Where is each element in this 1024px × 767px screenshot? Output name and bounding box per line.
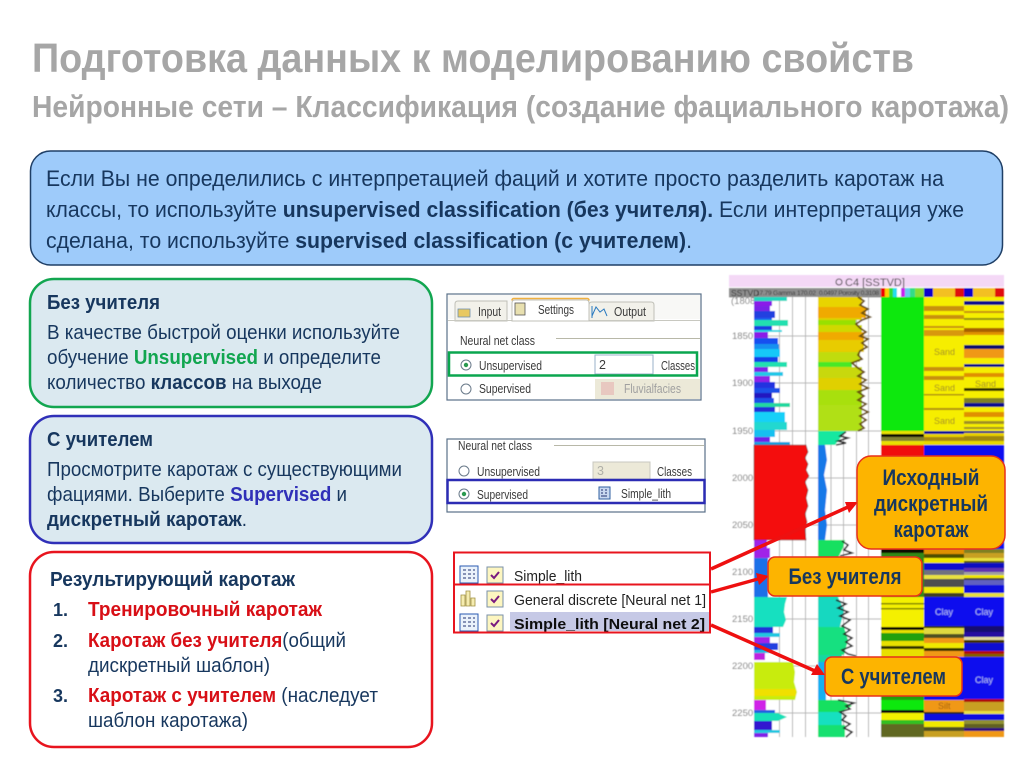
track 5: supervised facies: Sand <box>975 379 996 389</box>
screenshot: settings tab unsupervised: Classes <box>661 359 695 373</box>
callout: source discrete log <box>857 456 1005 549</box>
arrow: to supervised <box>711 625 825 675</box>
list: log types: Каротаж без учителя(общий <box>88 630 346 652</box>
screenshot: log list: Simple_lith <box>514 568 582 585</box>
screenshot: supervised selection: Simple_lith <box>621 487 671 501</box>
highlight: training log <box>454 552 710 584</box>
text: unsupervised body <box>47 322 400 394</box>
heading: unsupervised: Без учителя <box>47 292 160 314</box>
screenshot: supervised selection: Neural net class <box>458 439 532 453</box>
depth axis: 2050 <box>732 520 753 531</box>
list: log types: дискретный шаблон) <box>88 655 270 677</box>
panel: intro callout: сделана, то используйте supervised classification (с учителем). <box>46 228 692 253</box>
depth axis: 1950 <box>732 426 753 437</box>
screenshot: settings tab unsupervised: Neural net class <box>460 334 535 348</box>
log header: 17.79 Gamma 170.02 <box>756 290 816 297</box>
depth axis: 1850 <box>732 331 753 342</box>
text: supervised body: фациями. Выберите Supervised и <box>47 484 347 506</box>
highlight: supervised <box>448 480 704 503</box>
title: Подготовка данных к моделированию свойств <box>32 35 914 81</box>
panel: supervised <box>30 416 432 543</box>
callout: unsupervised <box>768 557 922 596</box>
screenshot: settings tab unsupervised: Output <box>614 305 646 319</box>
list: log types: 1. <box>53 600 68 620</box>
text: supervised body <box>47 459 402 531</box>
callout: source discrete log: каротаж <box>894 517 969 542</box>
log header <box>729 275 1004 298</box>
screenshot: settings tab unsupervised: 2 <box>599 358 606 372</box>
track 4: unsupervised facies: Sand <box>934 416 955 426</box>
screenshot: log list: Simple_lith [Neural net 2] <box>514 616 705 633</box>
callout: supervised: С учителем <box>841 664 946 689</box>
text: supervised body: Просмотрите каротаж с существующими <box>47 459 402 481</box>
screenshot: settings tab unsupervised: Supervised <box>479 382 531 396</box>
arrow: to unsupervised <box>711 573 769 592</box>
list: log types: 3. <box>53 686 68 706</box>
list: log types <box>53 599 378 732</box>
depth axis: 2200 <box>732 661 753 672</box>
screenshot: supervised selection: Supervised <box>477 488 528 502</box>
callout: unsupervised: Без учителя <box>788 564 902 589</box>
depth axis: 2100 <box>732 567 753 578</box>
track 4: unsupervised facies: Clay <box>935 607 954 617</box>
title <box>32 35 1009 124</box>
depth axis <box>731 296 758 719</box>
screenshot: settings tab unsupervised: Unsupervised <box>479 359 542 373</box>
depth axis: 1900 <box>732 378 753 389</box>
heading: resulting log: Результирующий каротаж <box>50 569 296 591</box>
chart: well log display <box>729 275 1004 737</box>
depth axis: 2000 <box>732 473 753 484</box>
track 2: porosity <box>818 297 870 737</box>
screenshot: log list: General discrete [Neural net 1] <box>514 592 706 609</box>
list: log types: 2. <box>53 631 68 651</box>
panel: resulting log <box>30 552 432 747</box>
callout: source discrete log: Исходный <box>882 465 980 490</box>
depth axis: 2250 <box>732 708 753 719</box>
track 1: gamma <box>754 297 881 737</box>
screenshot: supervised selection <box>447 439 705 512</box>
text: supervised body: дискретный каротаж. <box>47 509 247 531</box>
arrow: to source log <box>711 502 858 569</box>
screenshot: supervised selection: Unsupervised <box>477 465 540 479</box>
depth axis: (1808) <box>731 296 758 307</box>
panel: intro callout: Если Вы не определились с интерпретацией фаций и хотите просто разделить каротаж на <box>46 166 945 191</box>
track 4: unsupervised facies: Sand <box>934 347 955 357</box>
panel: intro callout: классы, то используйте unsupervised classification (без учителя). Если интерпретация уже <box>46 197 964 222</box>
log header: 0.0497 Porosity 0.3108 <box>819 290 879 297</box>
track 4: unsupervised facies: Silt <box>938 701 951 711</box>
callout: source discrete log: дискретный <box>874 491 988 516</box>
depth axis: 2150 <box>732 614 753 625</box>
track 4: unsupervised facies <box>924 297 964 737</box>
text: unsupervised body: обучение Unsupervised и определите <box>47 347 381 369</box>
screenshot: supervised selection: 3 <box>597 464 604 478</box>
highlight: unsupervised <box>449 352 697 376</box>
track 4: unsupervised facies: Sand <box>934 383 955 393</box>
panel: intro callout <box>30 151 1002 265</box>
screenshot: settings tab unsupervised: Fluvialfacies <box>624 382 681 396</box>
log header: SSTVD <box>731 288 759 298</box>
list: log types: Каротаж с учителем (наследует <box>88 685 378 707</box>
log header: C4 [SSTVD] <box>845 277 905 289</box>
screenshot: log list <box>454 552 710 633</box>
list: log types: шаблон каротажа) <box>88 710 248 732</box>
highlight: neural net logs <box>454 584 710 632</box>
track 3: training facies <box>881 297 924 737</box>
screenshot: settings tab unsupervised: Input <box>478 305 501 319</box>
screenshot: supervised selection: Classes <box>657 465 692 479</box>
callout: supervised <box>825 657 962 696</box>
panel: unsupervised <box>30 279 432 407</box>
track 5: supervised facies: Clay <box>975 675 994 685</box>
text: unsupervised body: количество классов на выходе <box>47 372 322 394</box>
text: unsupervised body: В качестве быстрой оценки используйте <box>47 322 400 344</box>
screenshot: settings tab unsupervised: Settings <box>538 303 574 317</box>
track 5: supervised facies <box>964 297 1004 737</box>
heading: supervised: С учителем <box>47 429 153 451</box>
screenshot: settings tab unsupervised <box>447 294 701 400</box>
list: log types: Тренировочный каротаж <box>88 599 323 621</box>
track 5: supervised facies: Clay <box>975 607 994 617</box>
